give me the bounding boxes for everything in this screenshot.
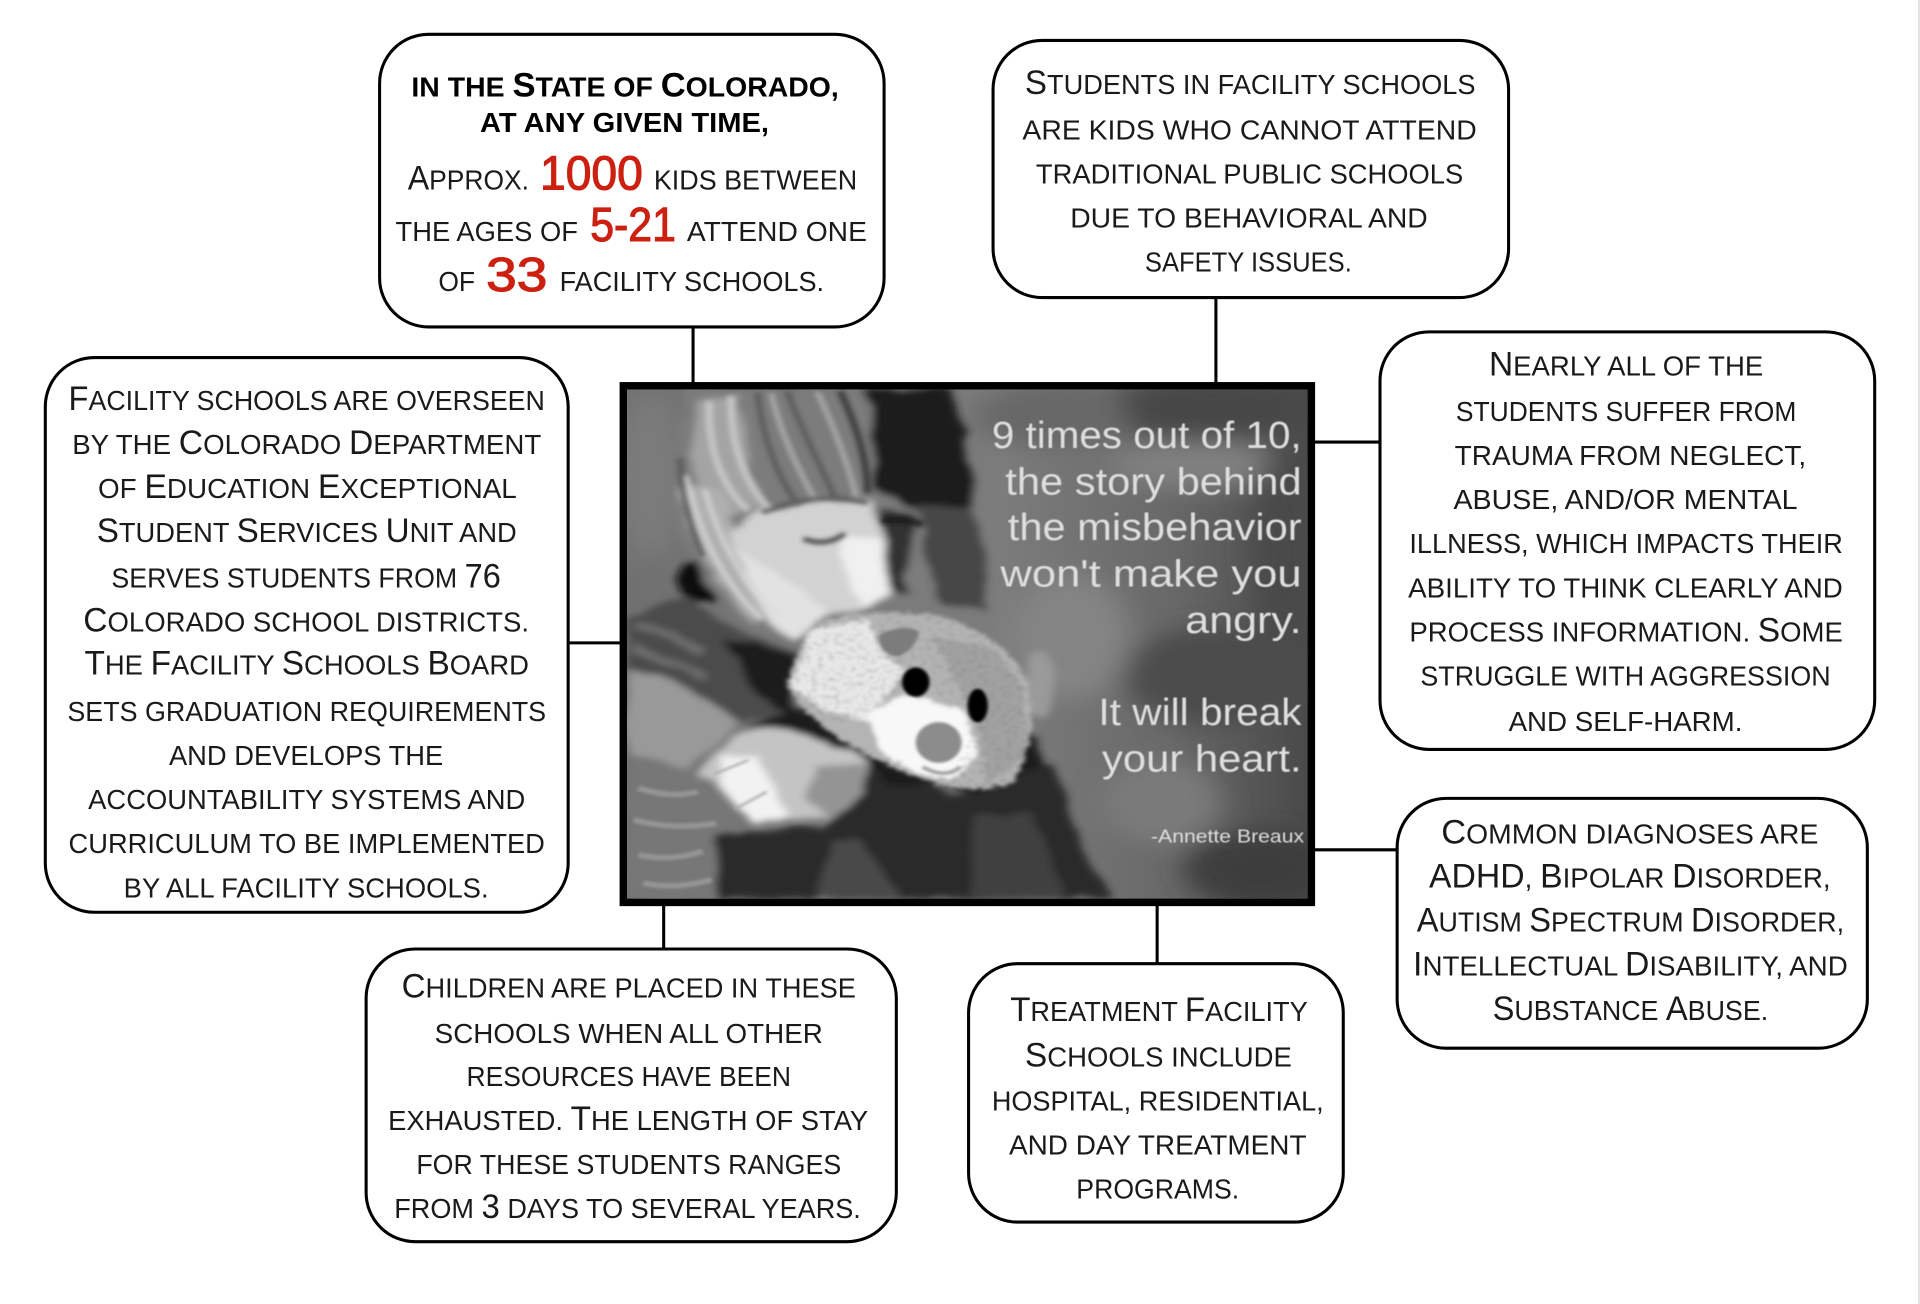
body text: FROM 3 DAYS TO SEVERAL YEARS. <box>394 1188 861 1226</box>
box outline <box>1397 798 1867 1048</box>
statistics text: ATTEND ONE <box>687 216 867 247</box>
body text: STUDENT SERVICES UNIT AND <box>97 512 517 550</box>
body text: FACILITY SCHOOLS ARE OVERSEEN <box>69 380 545 418</box>
photo frame <box>620 382 1315 906</box>
body text <box>992 991 1324 1205</box>
hair strands <box>680 391 923 620</box>
body text: AND DAY TREATMENT <box>1009 1129 1307 1160</box>
panel: common diagnoses <box>1397 798 1867 1048</box>
photo: girl hugging teddy bear <box>626 389 1308 899</box>
body text: FOR THESE STUDENTS RANGES <box>416 1149 841 1180</box>
body text: TREATMENT FACILITY <box>1010 991 1308 1029</box>
body text: SCHOOLS WHEN ALL OTHER <box>435 1018 823 1049</box>
statistics text: FACILITY SCHOOLS. <box>560 266 824 297</box>
body text: AND DEVELOPS THE <box>169 740 443 771</box>
hair mass <box>673 389 991 638</box>
statistics text: APPROX. <box>408 160 529 198</box>
body text: HOSPITAL, RESIDENTIAL, <box>992 1085 1324 1116</box>
photo quote text: 9 times out of 10, <box>992 415 1302 457</box>
statistics text <box>396 66 867 302</box>
statistics text: 33 <box>486 249 547 302</box>
body text: AND SELF-HARM. <box>1509 706 1742 737</box>
body text: BY ALL FACILITY SCHOOLS. <box>124 872 489 903</box>
panel: Colorado key statistics <box>380 34 884 327</box>
body text: PROGRAMS. <box>1076 1174 1239 1205</box>
bear eyes <box>902 667 930 697</box>
body text <box>1413 813 1848 1028</box>
fur sleeve <box>627 672 744 767</box>
bear nose <box>916 722 962 763</box>
box outline <box>45 358 568 912</box>
body text: ACCOUNTABILITY SYSTEMS AND <box>88 784 525 815</box>
body text: THE FACILITY SCHOOLS BOARD <box>84 644 529 682</box>
box outline <box>1380 332 1875 749</box>
photo quote text: your heart. <box>1102 738 1302 780</box>
statistics text: OF <box>438 266 475 297</box>
box outline <box>366 949 896 1242</box>
body text: SUBSTANCE ABUSE. <box>1493 990 1768 1028</box>
panel: who attends facility schools <box>993 40 1509 298</box>
bear patch <box>879 628 919 656</box>
body text: TRADITIONAL PUBLIC SCHOOLS <box>1036 158 1463 189</box>
statistics text: IN THE STATE OF COLORADO, <box>411 66 839 104</box>
body text: SETS GRADUATION REQUIREMENTS <box>67 696 546 727</box>
lower coat <box>627 755 739 899</box>
photo quote text: angry. <box>1185 600 1302 642</box>
connector lines <box>567 296 1398 965</box>
box outline <box>380 34 884 327</box>
finger creases <box>714 760 767 809</box>
body text: INTELLECTUAL DISABILITY, AND <box>1413 946 1848 984</box>
body text: CHILDREN ARE PLACED IN THESE <box>402 968 856 1006</box>
body text: CURRICULUM TO BE IMPLEMENTED <box>69 828 545 859</box>
body text: ADHD, BIPOLAR DISORDER, <box>1429 858 1831 896</box>
body text: COLORADO SCHOOL DISTRICTS. <box>83 602 529 640</box>
panel: treatment facility types <box>969 964 1343 1222</box>
photo quote text: -Annette Breaux <box>1151 825 1304 846</box>
face <box>730 501 891 630</box>
body text: ABUSE, AND/OR MENTAL <box>1453 484 1798 515</box>
body text: SERVES STUDENTS FROM 76 <box>111 558 501 596</box>
body text: STUDENTS SUFFER FROM <box>1456 396 1796 427</box>
panel: placement and length of stay <box>366 949 896 1242</box>
body text: PROCESS INFORMATION. SOME <box>1409 611 1843 649</box>
body text: STUDENTS IN FACILITY SCHOOLS <box>1025 64 1476 102</box>
sleeve sheen <box>634 788 716 886</box>
panel: trauma <box>1380 332 1875 749</box>
body text: OF EDUCATION EXCEPTIONAL <box>98 468 517 506</box>
teddy bear head <box>787 612 1032 789</box>
body text <box>67 380 546 903</box>
statistics text: 1000 <box>540 148 643 201</box>
body text: AUTISM SPECTRUM DISORDER, <box>1417 902 1844 940</box>
bear ear <box>1023 653 1056 716</box>
photo quote text <box>992 415 1304 846</box>
body text <box>1408 346 1843 737</box>
body text: TRAUMA FROM NEGLECT, <box>1455 440 1806 471</box>
body text: STRUGGLE WITH AGGRESSION <box>1420 660 1831 691</box>
body text <box>388 968 868 1226</box>
body text: ARE KIDS WHO CANNOT ATTEND <box>1022 114 1477 145</box>
body text: NEARLY ALL OF THE <box>1489 346 1763 384</box>
body text: ABILITY TO THINK CLEARLY AND <box>1408 572 1843 603</box>
body text: COMMON DIAGNOSES ARE <box>1441 813 1818 851</box>
body text: SAFETY ISSUES. <box>1145 247 1352 278</box>
photo quote text: won't make you <box>999 554 1302 596</box>
box outline <box>969 964 1343 1222</box>
body text: RESOURCES HAVE BEEN <box>467 1061 791 1092</box>
statistics text: KIDS BETWEEN <box>654 165 857 196</box>
collar and coat upper <box>675 561 719 604</box>
closed eye <box>803 533 845 542</box>
photo quote text: the story behind <box>1005 462 1302 504</box>
panel: central photo with quote <box>618 377 1340 908</box>
panel: oversight and governance <box>45 358 568 912</box>
body text: DUE TO BEHAVIORAL AND <box>1070 203 1428 234</box>
hand and arm <box>698 728 865 822</box>
statistics text: AT ANY GIVEN TIME, <box>480 107 769 138</box>
body text: SCHOOLS INCLUDE <box>1025 1036 1292 1074</box>
statistics text: 5-21 <box>590 199 676 252</box>
box outline <box>993 40 1509 298</box>
photo quote text: It will break <box>1098 692 1303 734</box>
body text: BY THE COLORADO DEPARTMENT <box>72 424 541 462</box>
body text <box>1022 64 1477 278</box>
photo quote text: the misbehavior <box>1008 507 1302 549</box>
statistics text: THE AGES OF <box>396 216 578 247</box>
body text: ILLNESS, WHICH IMPACTS THEIR <box>1409 528 1843 559</box>
body text: EXHAUSTED. THE LENGTH OF STAY <box>388 1100 868 1138</box>
